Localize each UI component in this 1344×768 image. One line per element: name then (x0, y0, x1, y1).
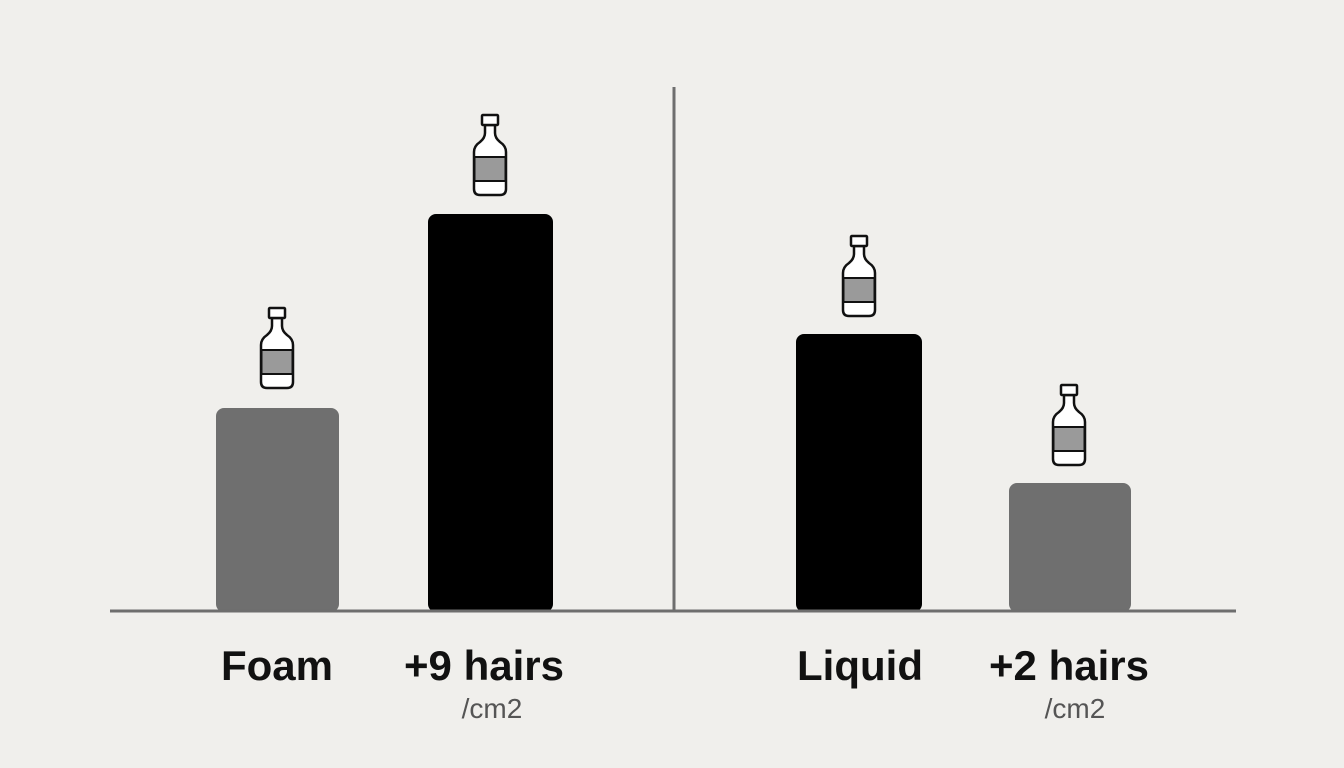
label: +2 hairs /cm2: +2 hairs (989, 642, 1149, 689)
panel: liquid chart (796, 236, 1149, 724)
panel: foam chart (216, 115, 564, 724)
icon: bottle +2 (1053, 385, 1085, 465)
icon: bottle foam (261, 308, 293, 388)
bar: foam (216, 408, 339, 612)
label: Foam: Foam (221, 642, 333, 689)
axis baseline (110, 610, 1236, 612)
label: +2 hairs /cm2 (989, 642, 1149, 724)
label: +2 hairs /cm2: /cm2 (1045, 693, 1105, 724)
bar: liquid (796, 334, 922, 612)
divider (672, 87, 676, 611)
label: Liquid: Liquid (797, 642, 923, 689)
bar: +2 hairs (1009, 483, 1131, 612)
label: +9 hairs /cm2: +9 hairs (404, 642, 564, 689)
bar: +9 hairs (428, 214, 553, 612)
label: +9 hairs /cm2: /cm2 (462, 693, 522, 724)
label: +9 hairs /cm2 (404, 642, 564, 724)
icon: bottle +9 (474, 115, 506, 195)
icon: bottle liquid (843, 236, 875, 316)
